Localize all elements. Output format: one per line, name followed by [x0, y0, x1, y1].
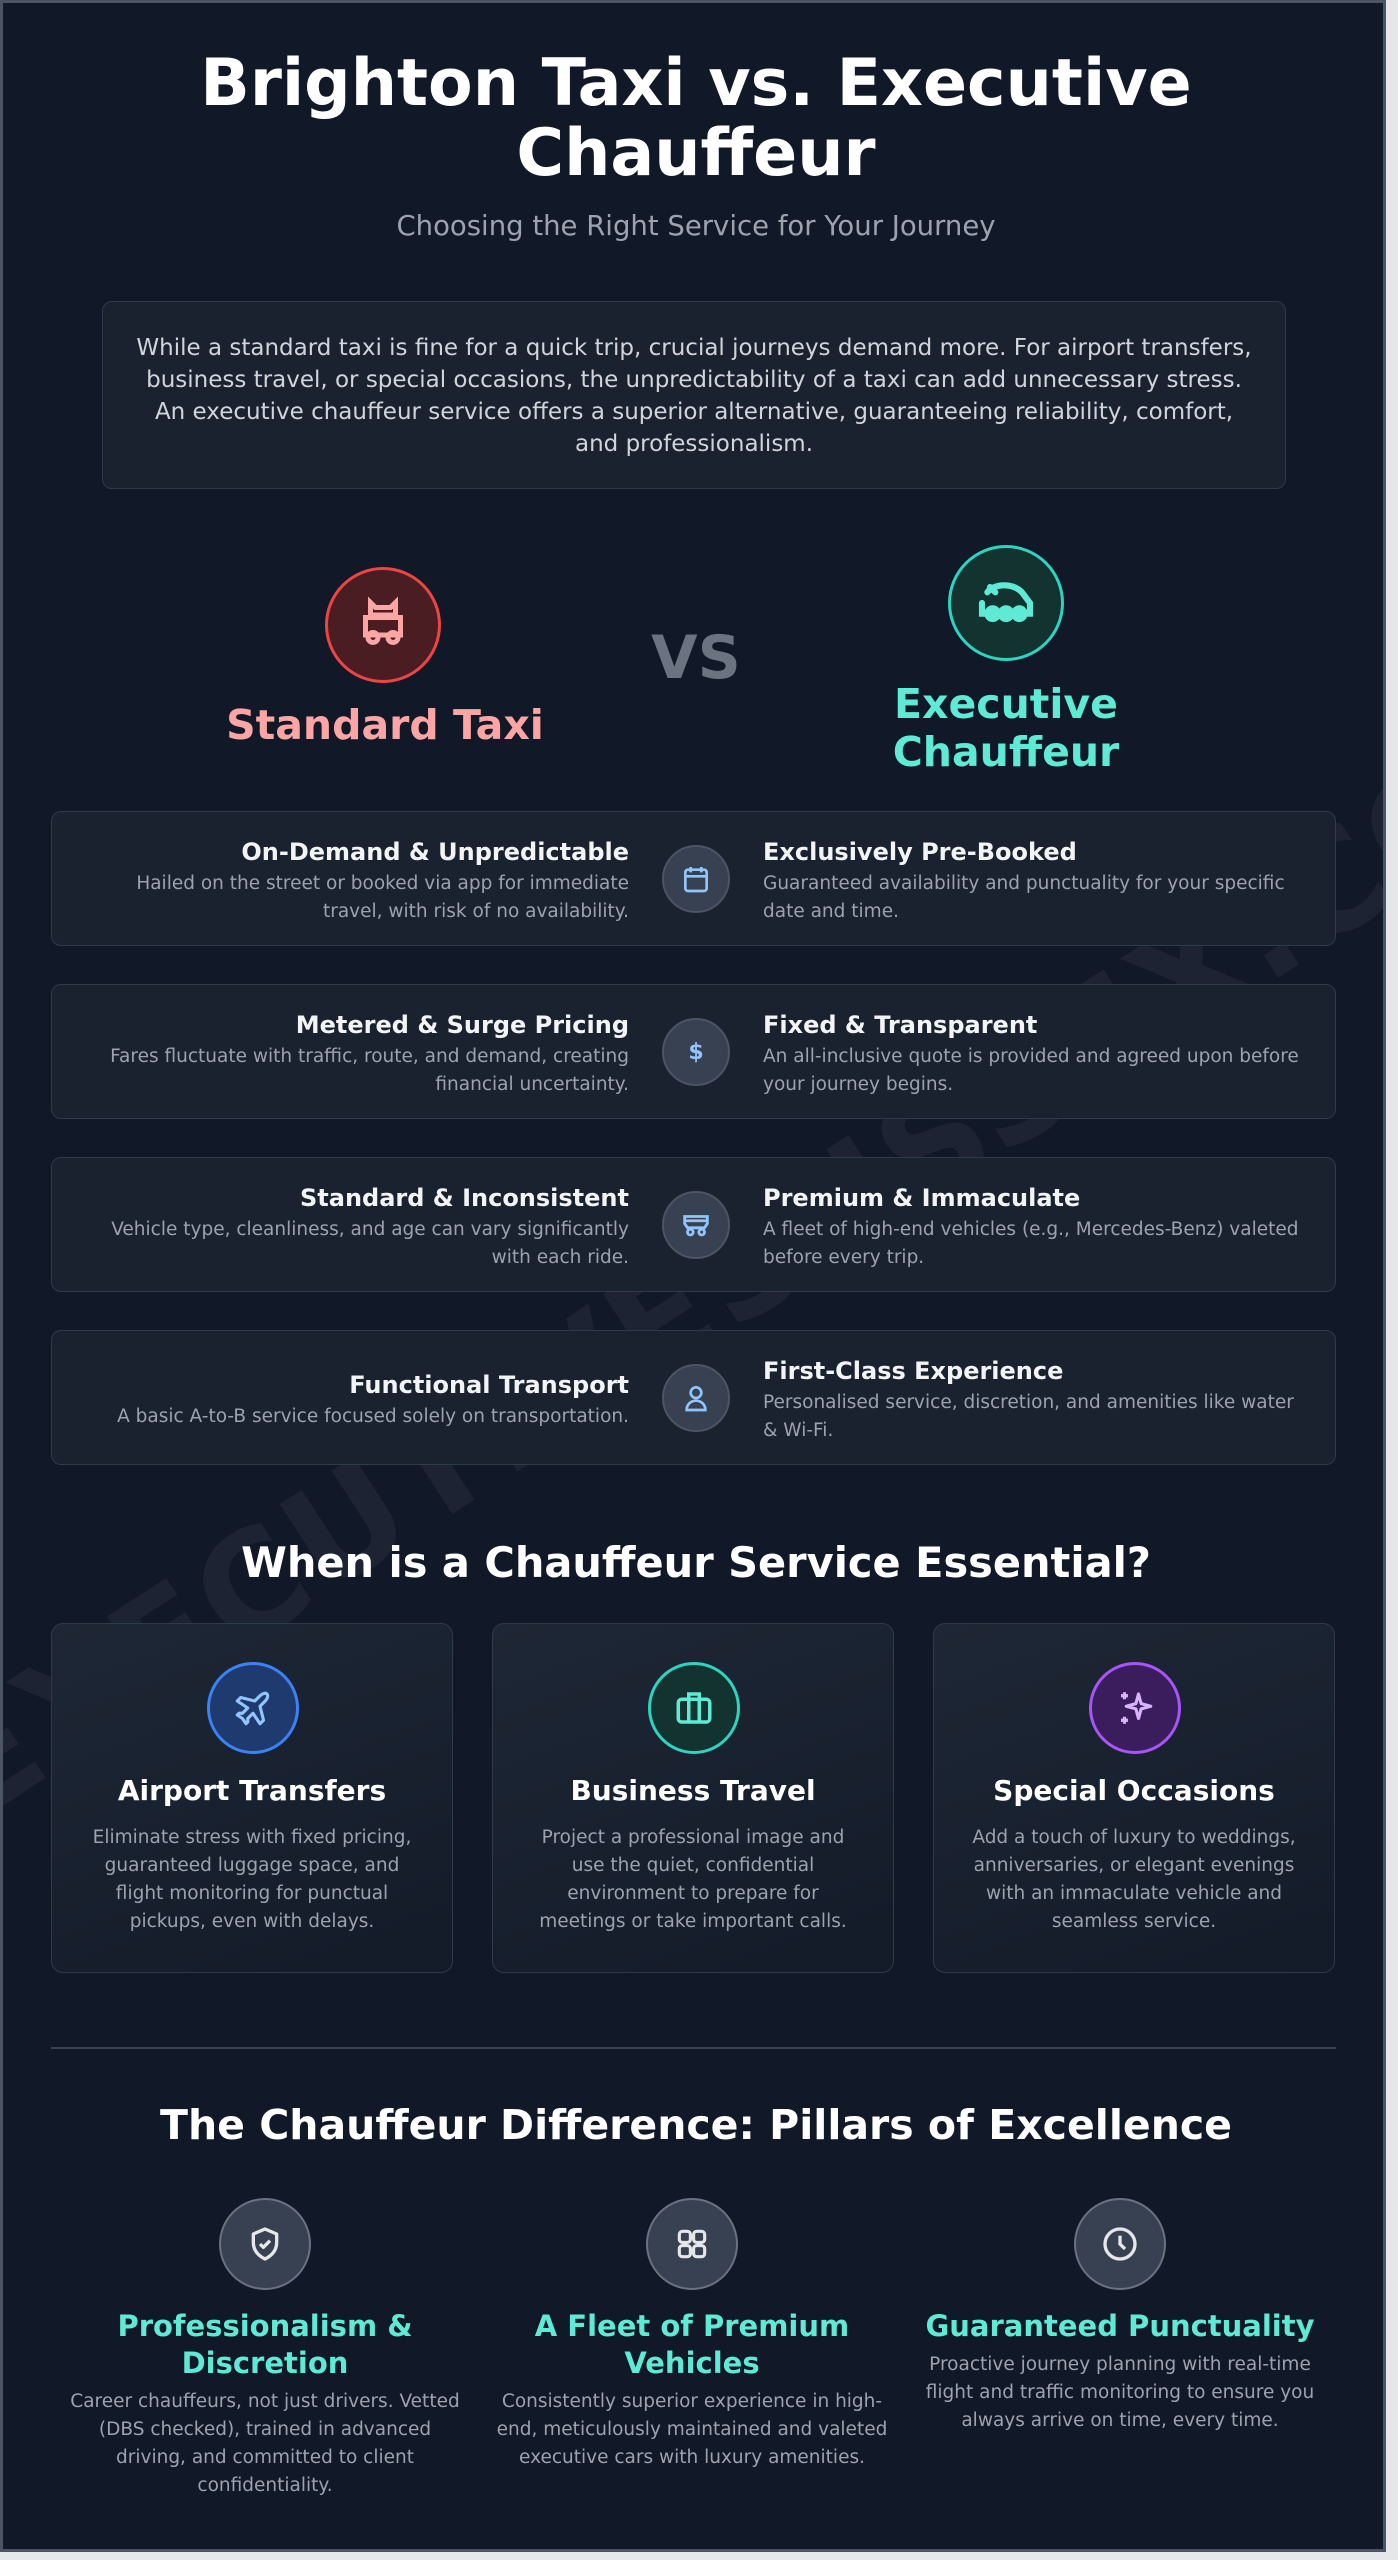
card: business: Project a professional image and use the quiet, confidential environment to prepare for meetings or take important calls.: [539, 1827, 847, 1932]
row: pricing: An all-inclusive quote is provided and agreed upon before your journey begins.: [763, 1046, 1299, 1095]
icon: clock: [1074, 2198, 1166, 2290]
heading: executive chauffeur: Executive: [894, 680, 1118, 728]
pillar: professionalism: [70, 2198, 460, 2496]
pillar: punctuality: Guaranteed Punctuality: [925, 2309, 1315, 2343]
icon: chauffeur car: [948, 545, 1064, 661]
icon: calendar: [662, 845, 730, 913]
pillar: fleet: A Fleet of Premium: [535, 2309, 849, 2343]
pillar: fleet: Vehicles: [624, 2346, 760, 2380]
heading: executive chauffeur: Chauffeur: [893, 728, 1119, 776]
card: airport: [51, 1623, 453, 1973]
pillar: professionalism: Discretion: [182, 2346, 348, 2380]
row: pricing: Metered & Surge Pricing: [296, 1011, 629, 1039]
row: booking: Exclusively Pre-Booked: [763, 838, 1077, 866]
row: vehicle: [51, 1157, 1336, 1292]
row: booking: Hailed on the street or booked via app for immediate travel, with risk of no availability.: [136, 873, 629, 922]
row: booking: On-Demand & Unpredictable: [241, 838, 629, 866]
row: vehicle: Premium & Immaculate: [763, 1184, 1080, 1212]
card: airport: Eliminate stress with fixed pricing, guaranteed luggage space, and flight monitoring for punctual pickups, even with delays.: [93, 1827, 411, 1932]
intro text box: [102, 301, 1286, 489]
intro text box: While a standard taxi is fine for a quick trip, crucial journeys demand more. For airport transfers, business travel, or special occasions, the unpredictability of a taxi can add unnecessary stress. An executive chauffeur service offers a superior alternative, guaranteeing reliability, comfort, and professionalism.: [136, 335, 1252, 457]
icon: shield: [219, 2198, 311, 2290]
row: pricing: Fixed & Transparent: [763, 1011, 1037, 1039]
heading: when essential: When is a Chauffeur Service Essential?: [241, 1538, 1151, 1587]
card: occasions: [933, 1623, 1335, 1973]
pillar: professionalism: Professionalism &: [117, 2309, 413, 2343]
row: experience: First-Class Experience: [763, 1357, 1063, 1385]
row: vehicle: Standard & Inconsistent: [300, 1184, 629, 1212]
icon: car front: [662, 1191, 730, 1259]
icon: sparkles: [1089, 1662, 1181, 1754]
card: occasions: Add a touch of luxury to weddings, anniversaries, or elegant evenings with an immaculate vehicle and seamless service.: [972, 1827, 1296, 1932]
row: pricing: [51, 984, 1336, 1119]
row: pricing: Fares fluctuate with traffic, route, and demand, creating financial uncertainty.: [110, 1046, 629, 1095]
heading: pillars: The Chauffeur Difference: Pillars of Excellence: [160, 2101, 1232, 2149]
icon: grid: [646, 2198, 738, 2290]
vs label: VS: [651, 623, 741, 693]
title: Chauffeur: [516, 116, 876, 191]
row: experience: [51, 1330, 1336, 1465]
card: business: Business Travel: [570, 1774, 816, 1807]
icon: briefcase: [648, 1662, 740, 1754]
title: [200, 46, 1192, 191]
icon: dollar: $: [688, 1040, 704, 1064]
icon: plane: [207, 1662, 299, 1754]
pillar: punctuality: Proactive journey planning with real-time flight and traffic monitoring to ensure you always arrive on time, every time.: [926, 2354, 1314, 2431]
card: business: [492, 1623, 894, 1973]
pillar: fleet: Consistently superior experience in high-end, meticulously maintained and valeted executive cars with luxury amenities.: [497, 2391, 887, 2468]
row: experience: Personalised service, discretion, and amenities like water & Wi-Fi.: [763, 1392, 1294, 1441]
card: occasions: Special Occasions: [993, 1774, 1275, 1807]
row: experience: A basic A-to-B service focused solely on transportation.: [117, 1406, 629, 1427]
pillar: professionalism: Career chauffeurs, not just drivers. Vetted (DBS checked), trained in advanced driving, and committed to client confidentiality.: [70, 2391, 460, 2496]
row: vehicle: A fleet of high-end vehicles (e.g., Mercedes-Benz) valeted before every trip.: [763, 1219, 1298, 1268]
row: vehicle: Vehicle type, cleanliness, and age can vary significantly with each ride.: [111, 1219, 629, 1268]
pillar: punctuality: [925, 2198, 1315, 2431]
card: airport: Airport Transfers: [118, 1774, 386, 1807]
row: booking: [51, 811, 1336, 946]
title: Brighton Taxi vs. Executive: [200, 46, 1192, 121]
row: booking: Guaranteed availability and punctuality for your specific date and time.: [763, 873, 1285, 922]
subtitle: Choosing the Right Service for Your Journey: [396, 210, 996, 242]
icon: dollar: [662, 1018, 730, 1086]
row: experience: Functional Transport: [349, 1371, 629, 1399]
icon: person: [662, 1364, 730, 1432]
icon: taxi: [325, 567, 441, 683]
pillar: fleet: [497, 2198, 887, 2468]
heading: executive chauffeur: [893, 680, 1120, 776]
heading: standard taxi: Standard Taxi: [226, 701, 544, 749]
